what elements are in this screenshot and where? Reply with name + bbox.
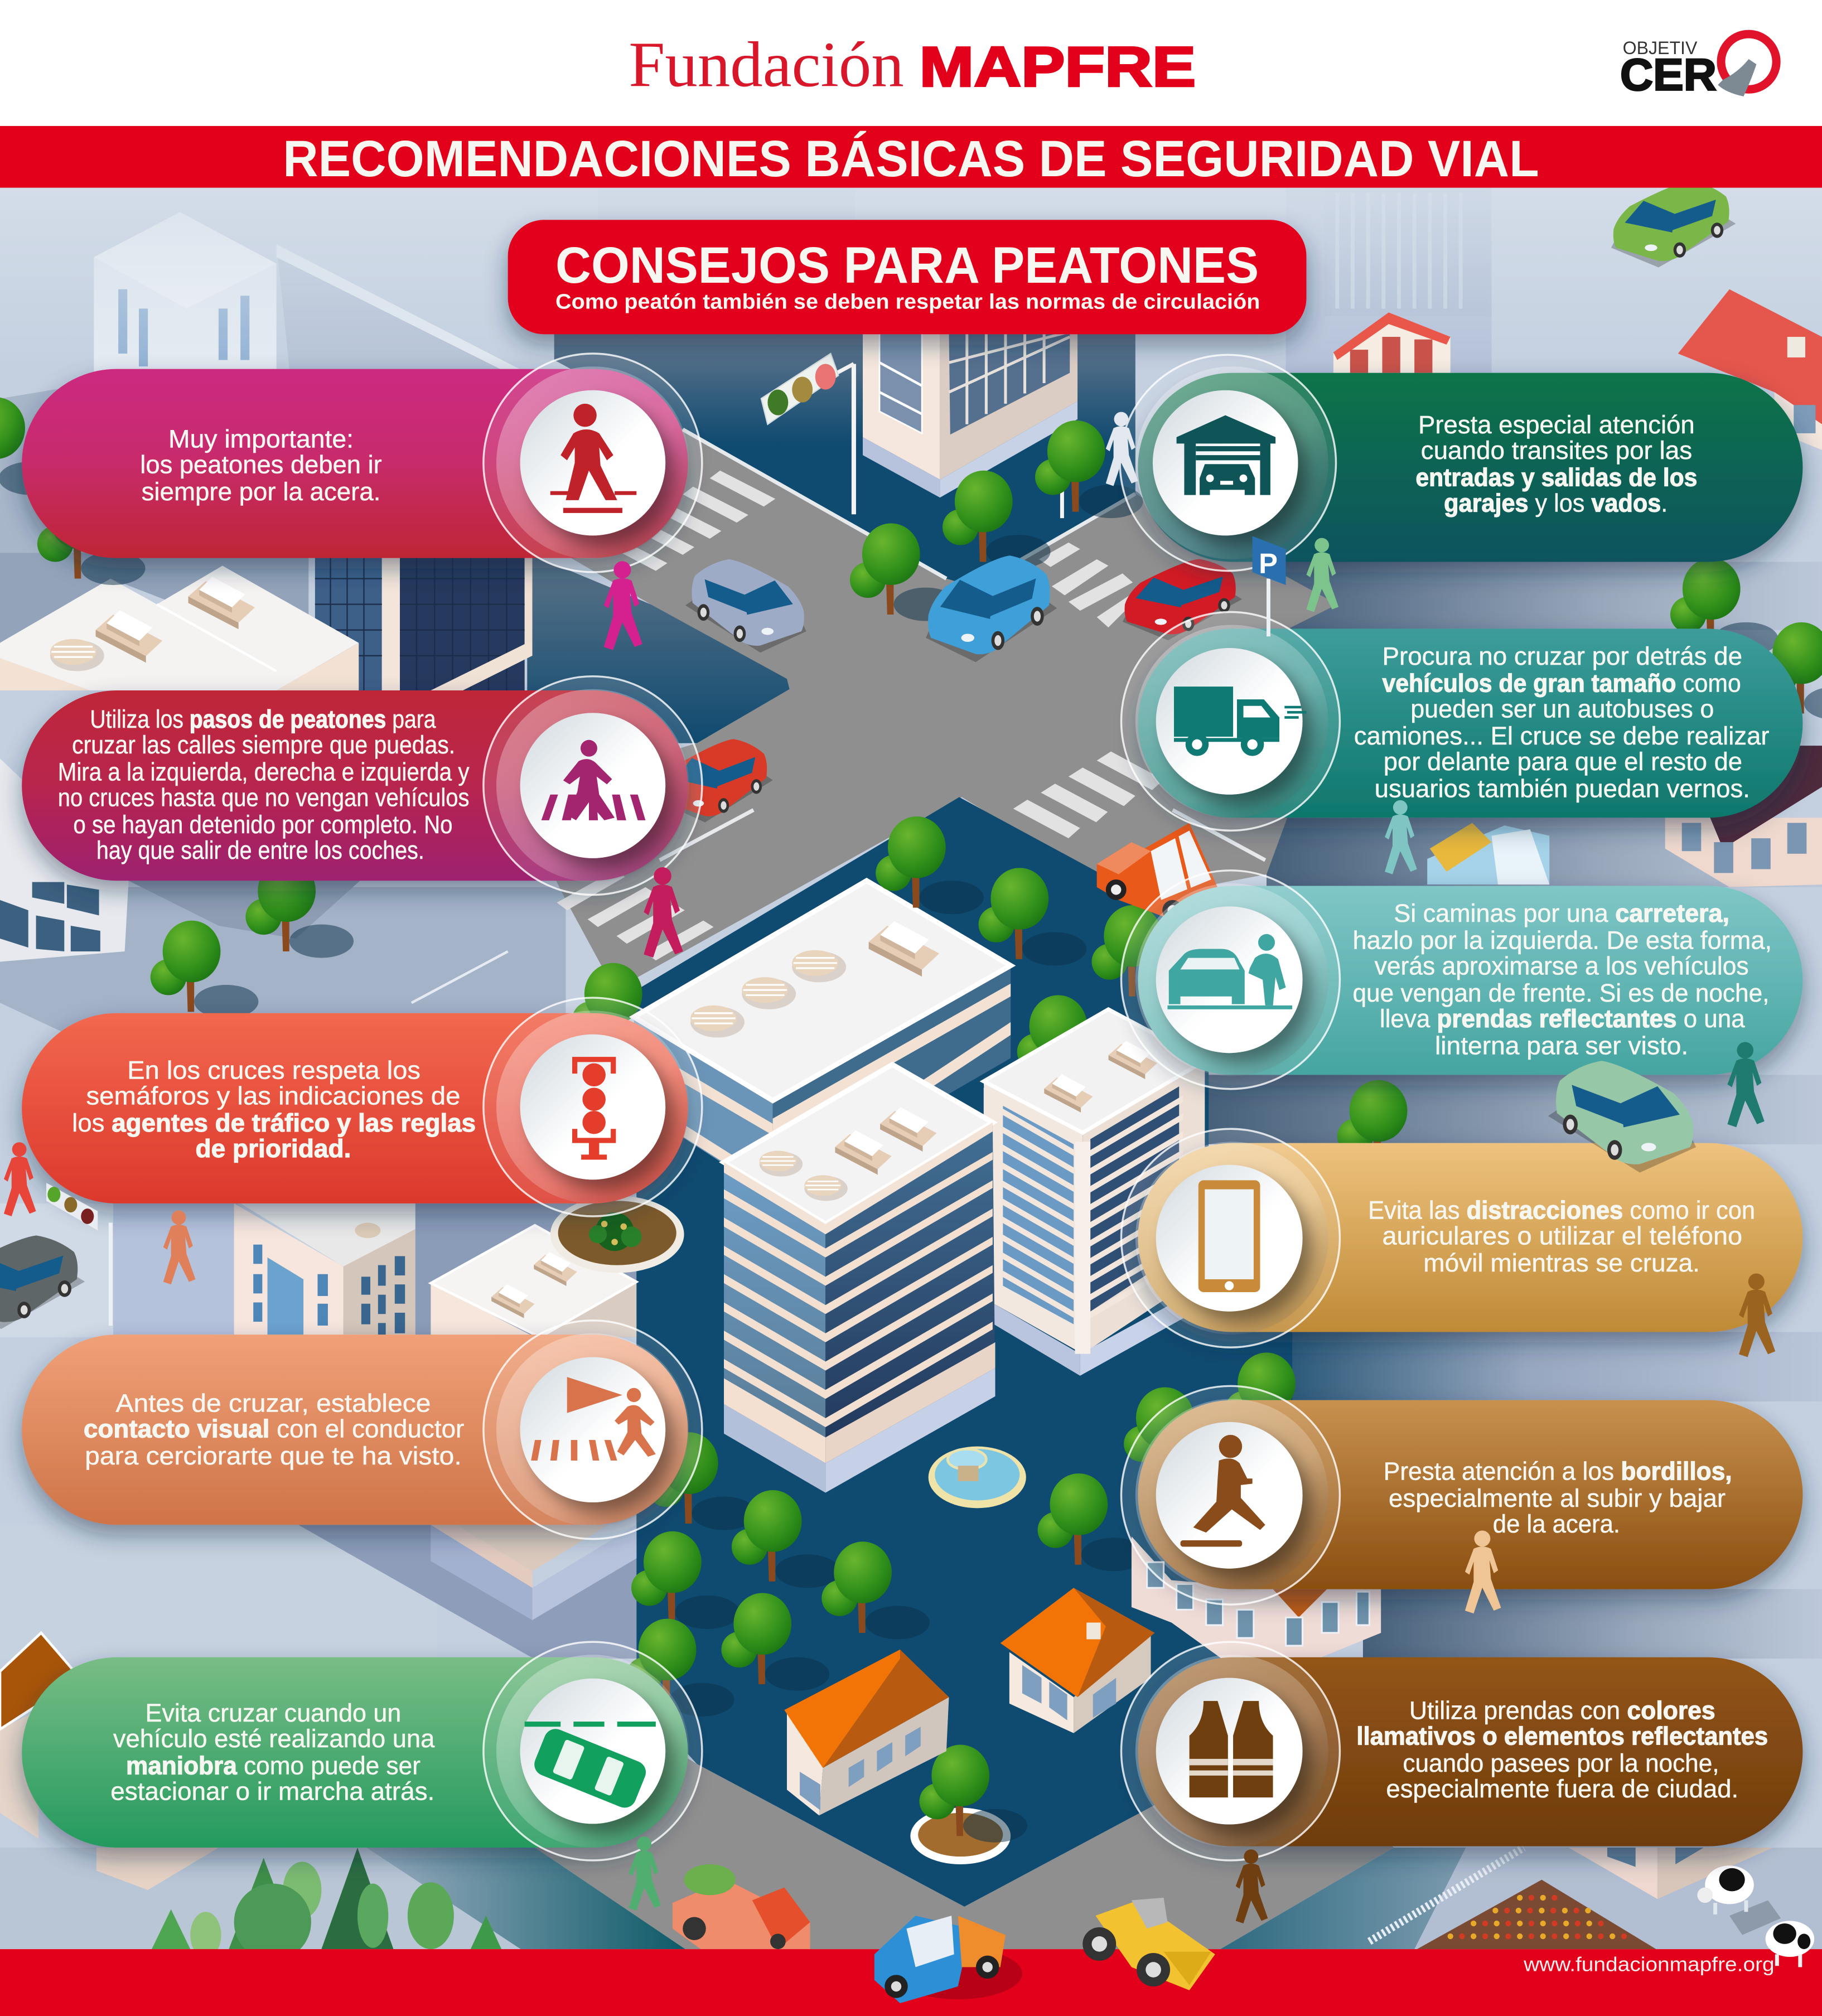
left buildings upper: [0, 555, 533, 690]
text: maniobra: Evita cruzar cuando un: [146, 1699, 401, 1727]
box truck: [1427, 823, 1549, 884]
text: carretera: linterna para ser visto.: [1435, 1031, 1688, 1060]
text: prendas: Utiliza prendas con colores: [1409, 1696, 1715, 1724]
house bottom right: [1569, 1848, 1773, 1899]
text: acera: los peatones deben ir: [140, 450, 382, 478]
mid-left buildings: [234, 1203, 636, 1620]
left buildings lower: [0, 758, 360, 962]
text: vehículos grandes: pueden ser un autobuses o: [1410, 694, 1714, 723]
pavement edge lines: [660, 429, 1265, 860]
text: contacto visual: [84, 1389, 464, 1470]
building: right tower: [984, 1009, 1205, 1376]
text: maniobra: vehículo esté realizando una: [113, 1724, 434, 1753]
text: prendas: [1356, 1696, 1768, 1803]
text: distracciones: auriculares o utilizar el teléfono: [1382, 1222, 1742, 1250]
icon: walker on kerb: [1181, 1435, 1265, 1546]
text: semáforos: semáforos y las indicaciones de: [86, 1081, 460, 1110]
row houses: [1132, 1536, 1381, 1659]
teal car overlapping panels: [1548, 1061, 1696, 1173]
icon: garage: [1177, 415, 1275, 495]
text: pasos de peatones: no cruces hasta que no vengan vehículos: [58, 784, 470, 812]
text: prendas: especialmente fuera de ciudad.: [1386, 1775, 1738, 1803]
text: contacto visual: para cerciorarte que te ha visto.: [85, 1442, 462, 1470]
top-left navy plot: [527, 553, 790, 743]
text: semáforos: de prioridad.: [195, 1134, 351, 1163]
text: semáforos: En los cruces respeta los: [127, 1056, 421, 1084]
traffic light left: [46, 1183, 110, 1326]
text: garajes: garajes y los vados.: [1444, 489, 1668, 518]
text: vehículos grandes: vehículos de gran tamaño como: [1382, 669, 1741, 697]
panel: acera: [22, 354, 702, 572]
text: garajes: [1415, 410, 1697, 518]
panel: bordillos: [1121, 1386, 1802, 1604]
planter: [550, 1196, 684, 1273]
fence: [1369, 1848, 1524, 1941]
header background: [0, 0, 1822, 126]
icon: pedestrian on pavement: [550, 404, 636, 513]
panel: carretera: [1121, 871, 1802, 1089]
text: garajes: Presta especial atención: [1418, 410, 1695, 439]
icon: traffic light: [572, 1057, 616, 1160]
text: pasos de peatones: Mira a la izquierda, derecha e izquierda y: [58, 757, 470, 786]
logo: Objetivo Cero: CER: [1620, 50, 1717, 100]
house bottom left: [0, 1633, 80, 1839]
panel: prendas: [1121, 1642, 1802, 1860]
red pickup bottom: [673, 1864, 810, 1949]
planted tree: [910, 1745, 1027, 1864]
text: distracciones: móvil mientras se cruza.: [1423, 1249, 1700, 1277]
building: top centre: [863, 332, 1077, 497]
top-centre navy plot: [554, 332, 1135, 588]
small pole near trees: [1061, 489, 1063, 518]
text: bordillos: de la acera.: [1493, 1510, 1620, 1538]
panel: pasos de peatones: [22, 676, 702, 895]
title band: [0, 126, 1822, 188]
text: contacto visual: Antes de cruzar, establece: [116, 1389, 431, 1417]
logo: Fundación MAPFRE: MAPFRE: [919, 35, 1196, 98]
flower field: [1417, 1880, 1656, 1949]
trees: [0, 397, 1822, 1717]
text: bordillos: Presta atención a los bordillos,: [1384, 1457, 1732, 1486]
text: prendas: cuando pasees por la noche,: [1403, 1749, 1719, 1777]
text: garajes: entradas y salidas de los: [1415, 463, 1697, 491]
panel: garajes: [1120, 355, 1802, 571]
panel: maniobra: [22, 1642, 702, 1860]
icon: manoeuvring car: [525, 1722, 656, 1811]
text: maniobra: [110, 1699, 434, 1806]
parking sign: P: [1259, 548, 1278, 579]
panel: vehículos grandes: [1121, 612, 1802, 830]
text: carretera: verás aproximarse a los vehículos: [1375, 952, 1749, 980]
text: carretera: que vengan de frente. Si es de noche,: [1352, 979, 1769, 1007]
text: semáforos: [72, 1056, 476, 1163]
vehicles on the roads: [0, 181, 1736, 1329]
website: www.fundacionmapfre.org: [1523, 1953, 1775, 1975]
text: prendas: llamativos o elementos reflectantes: [1356, 1722, 1768, 1751]
text: carretera: [1352, 899, 1772, 1060]
houses: [784, 1588, 1154, 1815]
icon: eye contact: [531, 1377, 656, 1461]
text: acera: Muy importante:: [168, 424, 354, 453]
fountain: [929, 1447, 1026, 1508]
traffic light top: [761, 354, 854, 514]
building: main tower: [724, 1065, 995, 1493]
road intersection: [514, 386, 1337, 990]
icon: car and pedestrian: [1167, 934, 1292, 1009]
trees behind the towers: [572, 905, 1200, 1093]
text: carretera: Si caminas por una carretera,: [1394, 899, 1729, 927]
pedestrians: [4, 412, 1775, 1923]
text: bordillos: especialmente al subir y bajar: [1389, 1484, 1726, 1512]
text: maniobra: estacionar o ir marcha atrás.: [110, 1777, 434, 1806]
yellow buggy: [1082, 1898, 1215, 1990]
panel: semáforos: [22, 998, 702, 1216]
houses top right: [1333, 289, 1822, 887]
icon: truck: [1174, 686, 1306, 756]
building: long low block: [634, 881, 1011, 1196]
heading panel: Como peatón también se deben respetar las normas de circulación: [555, 290, 1260, 313]
logo: Objetivo Cero: OBJETIV: [1623, 38, 1698, 58]
icon: reflective vest: [1190, 1701, 1273, 1797]
icon: zebra crossing: [542, 740, 645, 820]
text: semáforos: los agentes de tráfico y las reglas: [72, 1109, 476, 1137]
text: pasos de peatones: o se hayan detenido por completo. No: [73, 810, 453, 839]
title band: RECOMENDACIONES BÁSICAS DE SEGURIDAD VIAL: [283, 130, 1539, 187]
top wash: [0, 188, 1822, 368]
text: pasos de peatones: Utiliza los pasos de peatones para: [90, 705, 436, 733]
text: distracciones: Evita las distracciones como ir con: [1368, 1196, 1755, 1225]
logo: Objetivo Cero: [1620, 34, 1776, 100]
text: distracciones: [1368, 1196, 1755, 1277]
text: carretera: hazlo por la izquierda. De esta forma,: [1352, 926, 1772, 954]
panel: distracciones: [1121, 1129, 1802, 1347]
text: maniobra: maniobra como puede ser: [126, 1752, 421, 1780]
text: vehículos grandes: Procura no cruzar por detrás de: [1382, 642, 1742, 670]
text: contacto visual: contacto visual con el conductor: [84, 1415, 464, 1443]
blue truck: [874, 1916, 1022, 2003]
text: acera: [140, 424, 382, 506]
forest: [96, 1848, 501, 1961]
heading panel: [508, 220, 1306, 334]
text: acera: siempre por la acera.: [142, 477, 380, 506]
text: pasos de peatones: [58, 705, 470, 864]
text: vehículos grandes: usuarios también puedan vernos.: [1375, 774, 1750, 802]
text: bordillos: [1384, 1457, 1732, 1538]
text: garajes: cuando transites por las: [1421, 436, 1692, 465]
panel: contacto visual: [22, 1321, 702, 1539]
lower road: [535, 1723, 1394, 1949]
cows: [1697, 1865, 1814, 1967]
logo: Fundación MAPFRE: [629, 28, 1196, 100]
parking sign: [1253, 536, 1286, 636]
lower navy plot: [636, 797, 1292, 1907]
text: vehículos grandes: por delante para que el resto de: [1384, 747, 1742, 776]
text: carretera: lleva prendas reflectantes o una: [1380, 1004, 1745, 1033]
text: pasos de peatones: hay que salir de entre los coches.: [96, 836, 424, 864]
icon: smartphone: [1198, 1180, 1260, 1292]
logo: Fundación MAPFRE: Fundación: [629, 28, 904, 100]
orange truck: [1097, 823, 1220, 921]
footer band: [0, 1949, 1822, 2016]
crosswalks: [557, 471, 1164, 960]
top washed-out buildings: [94, 188, 1491, 373]
text: vehículos grandes: camiones... El cruce se debe realizar: [1354, 722, 1769, 750]
text: vehículos grandes: [1354, 642, 1769, 802]
heading panel: CONSEJOS PARA PEATONES: [555, 236, 1259, 294]
text: pasos de peatones: cruzar las calles siempre que puedas.: [72, 731, 455, 759]
